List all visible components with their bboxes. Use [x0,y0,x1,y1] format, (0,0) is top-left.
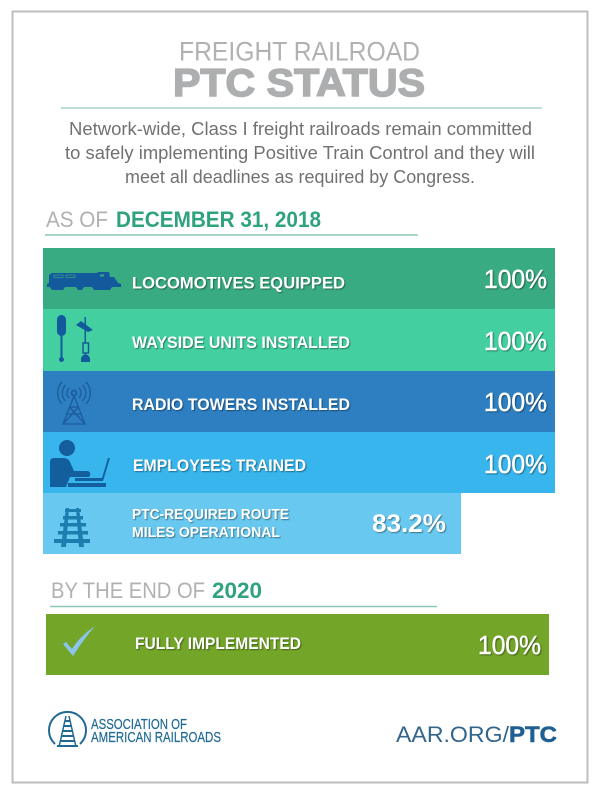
title [173,36,425,105]
intro paragraph: Network-wide, Class I freight railroads remain committed [69,119,532,139]
icon: check mark [63,626,95,656]
website address: PTC [509,722,557,747]
logo: Association of American Railroads: AMERICAN RAILROADS [91,730,221,746]
bar: employees trained [43,432,555,493]
bar: PTC-required route miles operational: MILES OPERATIONAL [132,525,280,541]
title: FREIGHT RAILROAD [179,36,420,66]
bar: locomotives equipped [43,248,555,309]
bar: employees trained: 100% [484,449,547,479]
bar: radio towers installed: 100% [484,387,547,417]
bar: wayside units installed: 100% [484,326,547,356]
bar: wayside units installed [43,309,555,371]
intro paragraph: to safely implementing Positive Train Control and they will [65,143,535,163]
bar: wayside units installed: WAYSIDE UNITS INSTALLED [132,334,350,352]
logo: Association of American Railroads: ASSOCIATION OF [91,717,187,733]
icon: rail track [54,508,90,547]
bar: PTC-required route miles operational [43,493,461,554]
icon: person at laptop [50,440,110,487]
heading: by the end of 2020: 2020 [212,578,262,603]
logo: Association of American Railroads [49,712,221,747]
bar: PTC-required route miles operational: 83.2% [372,510,446,538]
title: PTC STATUS [173,62,425,105]
bar: locomotives equipped: LOCOMOTIVES EQUIPPED [132,274,345,292]
bar: PTC-required route miles operational: PTC-REQUIRED ROUTE [132,507,289,523]
website address: AAR.ORG/ [396,722,510,747]
bar: fully implemented: 100% [478,630,541,660]
bar: locomotives equipped: 100% [484,264,547,294]
bar: employees trained: EMPLOYEES TRAINED [133,457,306,475]
website address [396,722,557,747]
bar: fully implemented: FULLY IMPLEMENTED [135,635,301,653]
heading: as of December 31, 2018: AS OF [46,207,108,232]
heading: as of December 31, 2018: DECEMBER 31, 2018 [116,207,321,232]
intro paragraph: meet all deadlines as required by Congress. [125,167,475,187]
icon: radio tower [58,382,90,424]
intro paragraph [65,119,535,187]
icon: locomotive [47,272,121,290]
icon: signals [57,315,93,362]
bar: fully implemented [46,614,549,675]
heading: by the end of 2020: BY THE END OF [51,578,205,603]
bar: radio towers installed: RADIO TOWERS INSTALLED [132,396,350,414]
icon: logo track in circle [49,712,86,747]
bar: radio towers installed [43,371,555,432]
